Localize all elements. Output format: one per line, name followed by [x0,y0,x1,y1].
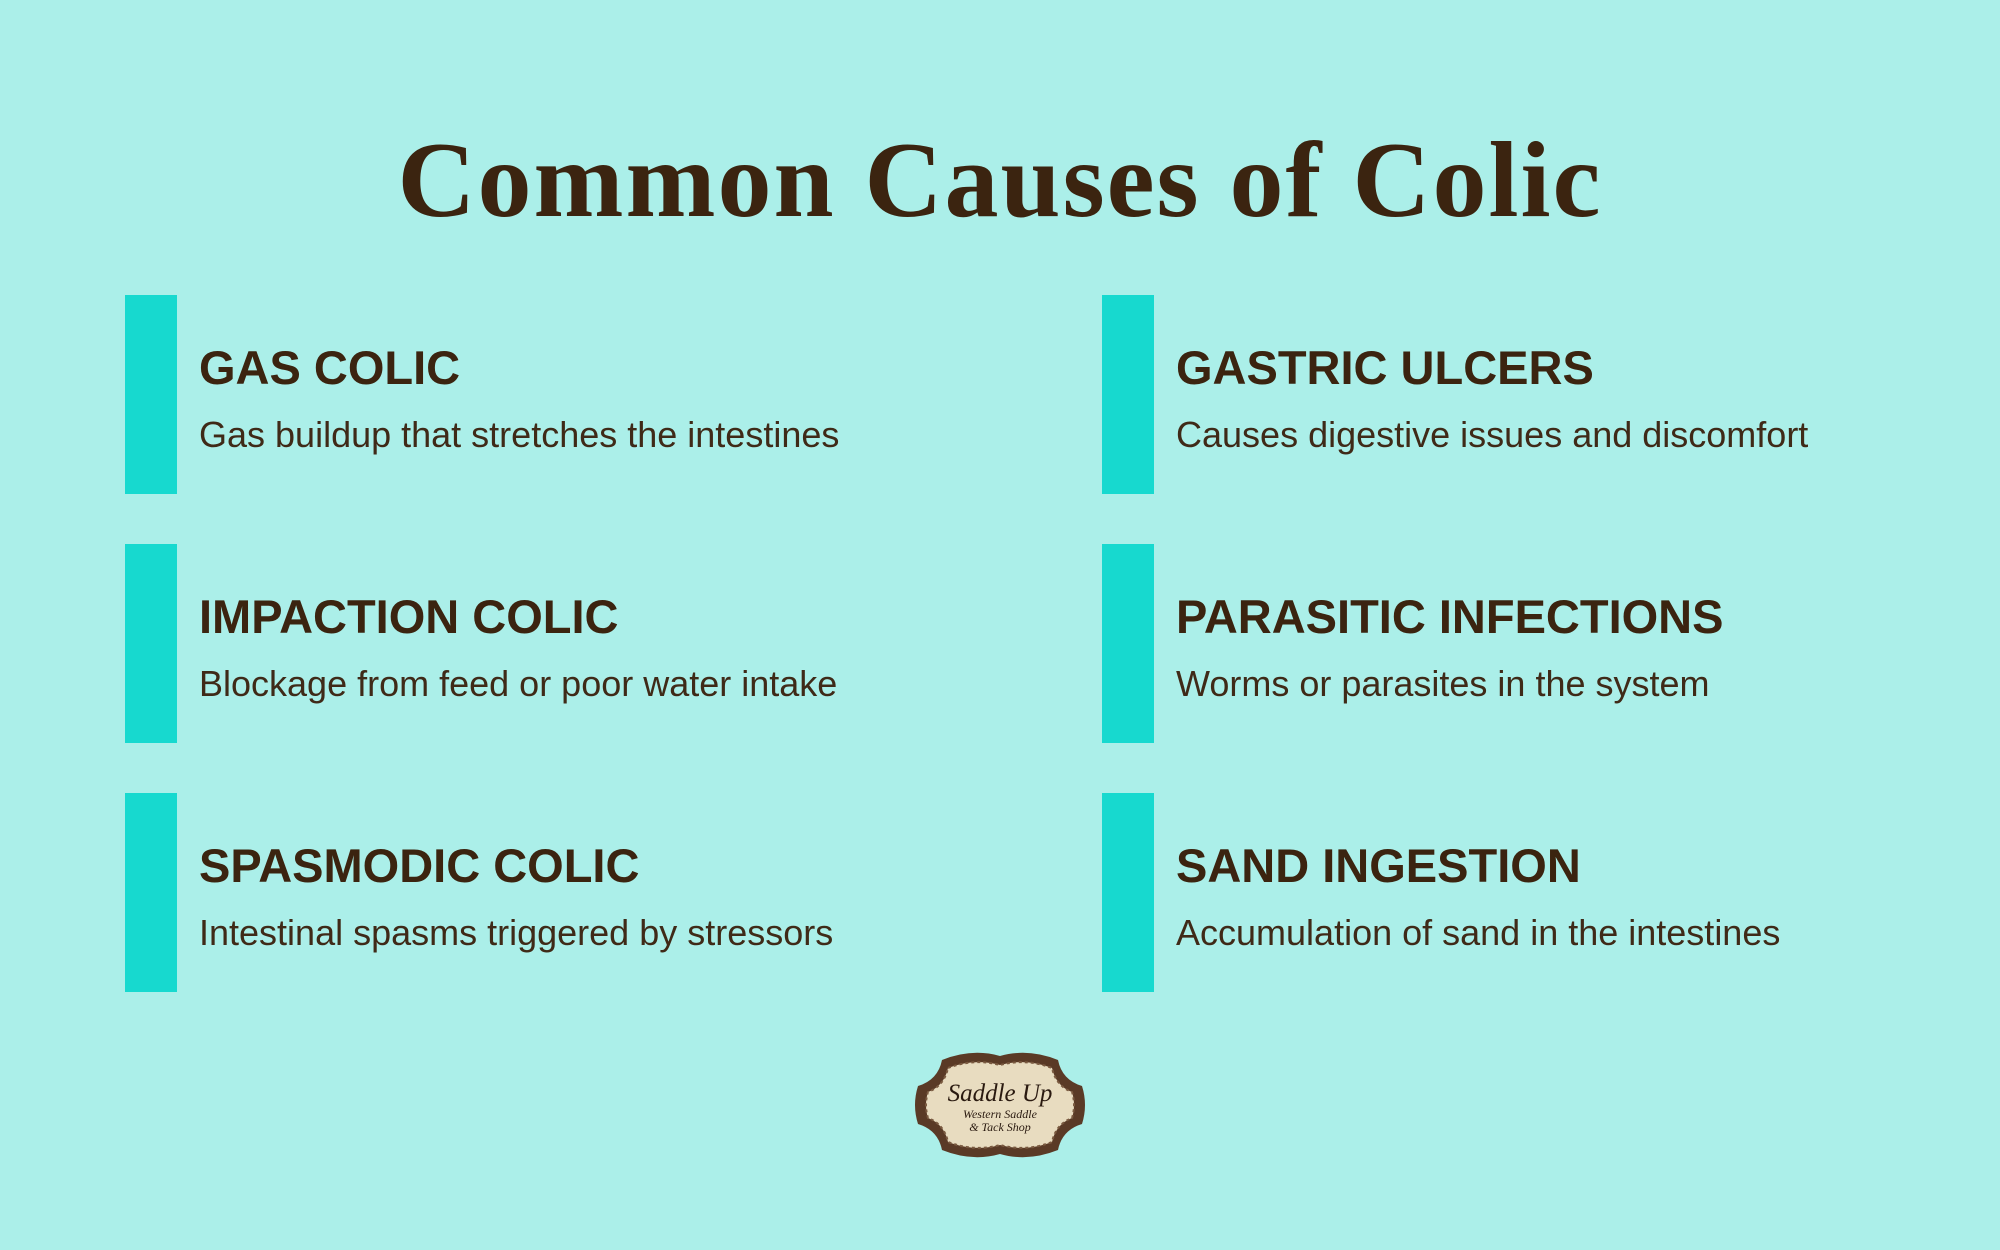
heading: gastric ulcers: GASTRIC ULCERS [1176,341,1594,394]
panel: parasitic infections [1102,544,1723,743]
panel: gas colic [125,295,839,494]
panel: impaction colic [125,544,837,743]
text: sand ingestion: Accumulation of sand in the intestines [1176,912,1780,953]
heading: sand ingestion: SAND INGESTION [1176,839,1581,892]
logo: Western Saddle [963,1107,1038,1121]
text: gastric ulcers: Causes digestive issues and discomfort [1176,414,1808,455]
heading: impaction colic: IMPACTION COLIC [199,590,618,643]
logo: & Tack Shop [969,1120,1031,1134]
logo: Saddle Up [948,1080,1052,1107]
heading: spasmodic colic: SPASMODIC COLIC [199,839,639,892]
text: parasitic infections: Worms or parasites in the system [1176,663,1710,704]
panel: gastric ulcers [1102,295,1808,494]
title: Common Causes of Colic [398,121,1602,240]
heading: parasitic infections: PARASITIC INFECTIONS [1176,590,1723,643]
text: spasmodic colic: Intestinal spasms triggered by stressors [199,912,833,953]
logo [915,1052,1085,1158]
text: impaction colic: Blockage from feed or poor water intake [199,663,837,704]
panel: spasmodic colic [125,793,833,992]
text: gas colic: Gas buildup that stretches the intestines [199,414,839,455]
panel: sand ingestion [1102,793,1780,992]
heading: gas colic: GAS COLIC [199,341,460,394]
